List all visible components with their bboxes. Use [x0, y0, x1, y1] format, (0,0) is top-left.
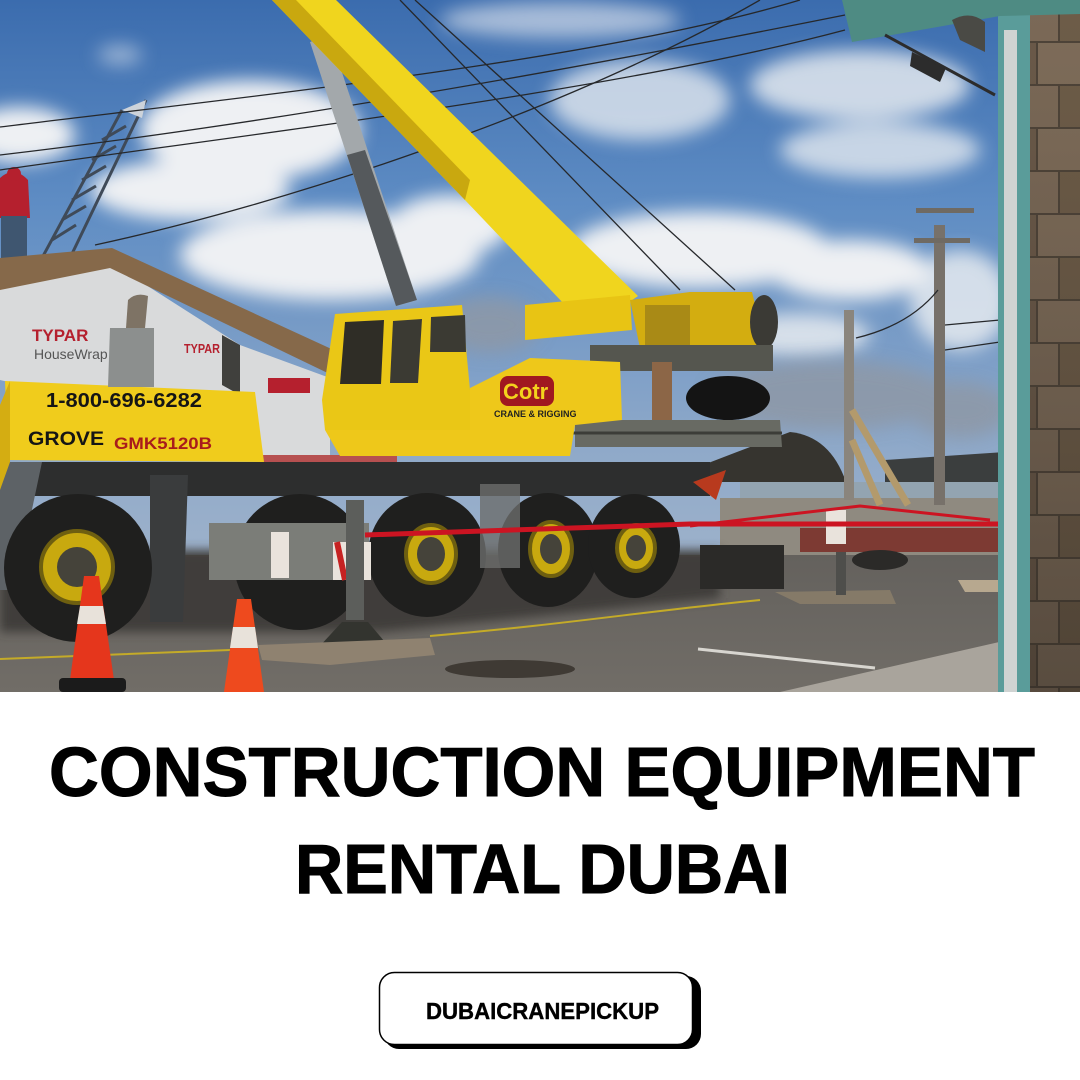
crane cab and body: Cotr	[503, 379, 549, 404]
crane cab and body: CRANE & RIGGING	[494, 409, 577, 419]
photo: crane at a roadside work site	[0, 0, 1080, 692]
crane upper works	[525, 292, 782, 447]
road	[0, 550, 1010, 692]
title	[49, 733, 1035, 908]
building with house wrap	[0, 248, 397, 466]
button: DUBAICRANEPICKUP	[380, 972, 701, 1049]
building with house wrap: TYPAR	[184, 341, 220, 356]
title line 2: RENTAL DUBAI	[295, 830, 790, 908]
outrigger beams and pads	[209, 484, 1005, 665]
red warning tape	[365, 470, 1004, 535]
background lattice crane and worker	[0, 100, 146, 264]
building with house wrap: HouseWrap	[34, 346, 108, 362]
utility poles and wires	[0, 0, 1000, 505]
button: DUBAICRANEPICKUP: DUBAICRANEPICKUP	[426, 998, 659, 1024]
truck chassis and panels: 1-800-696-6282	[46, 390, 202, 412]
crane cab and body	[322, 305, 622, 456]
wheels	[4, 493, 680, 642]
title line 1: CONSTRUCTION EQUIPMENT	[49, 733, 1035, 811]
distant hills and water	[710, 432, 998, 555]
traffic cones	[59, 576, 264, 692]
truck chassis and panels: GROVE	[28, 429, 104, 450]
truck chassis and panels	[0, 295, 710, 622]
building with house wrap: TYPAR	[32, 326, 88, 345]
sky with clouds	[0, 0, 998, 555]
boom and hydraulic ram	[272, 0, 638, 306]
shingled building at right	[842, 0, 1080, 692]
truck chassis and panels: GMK5120B	[114, 434, 212, 453]
